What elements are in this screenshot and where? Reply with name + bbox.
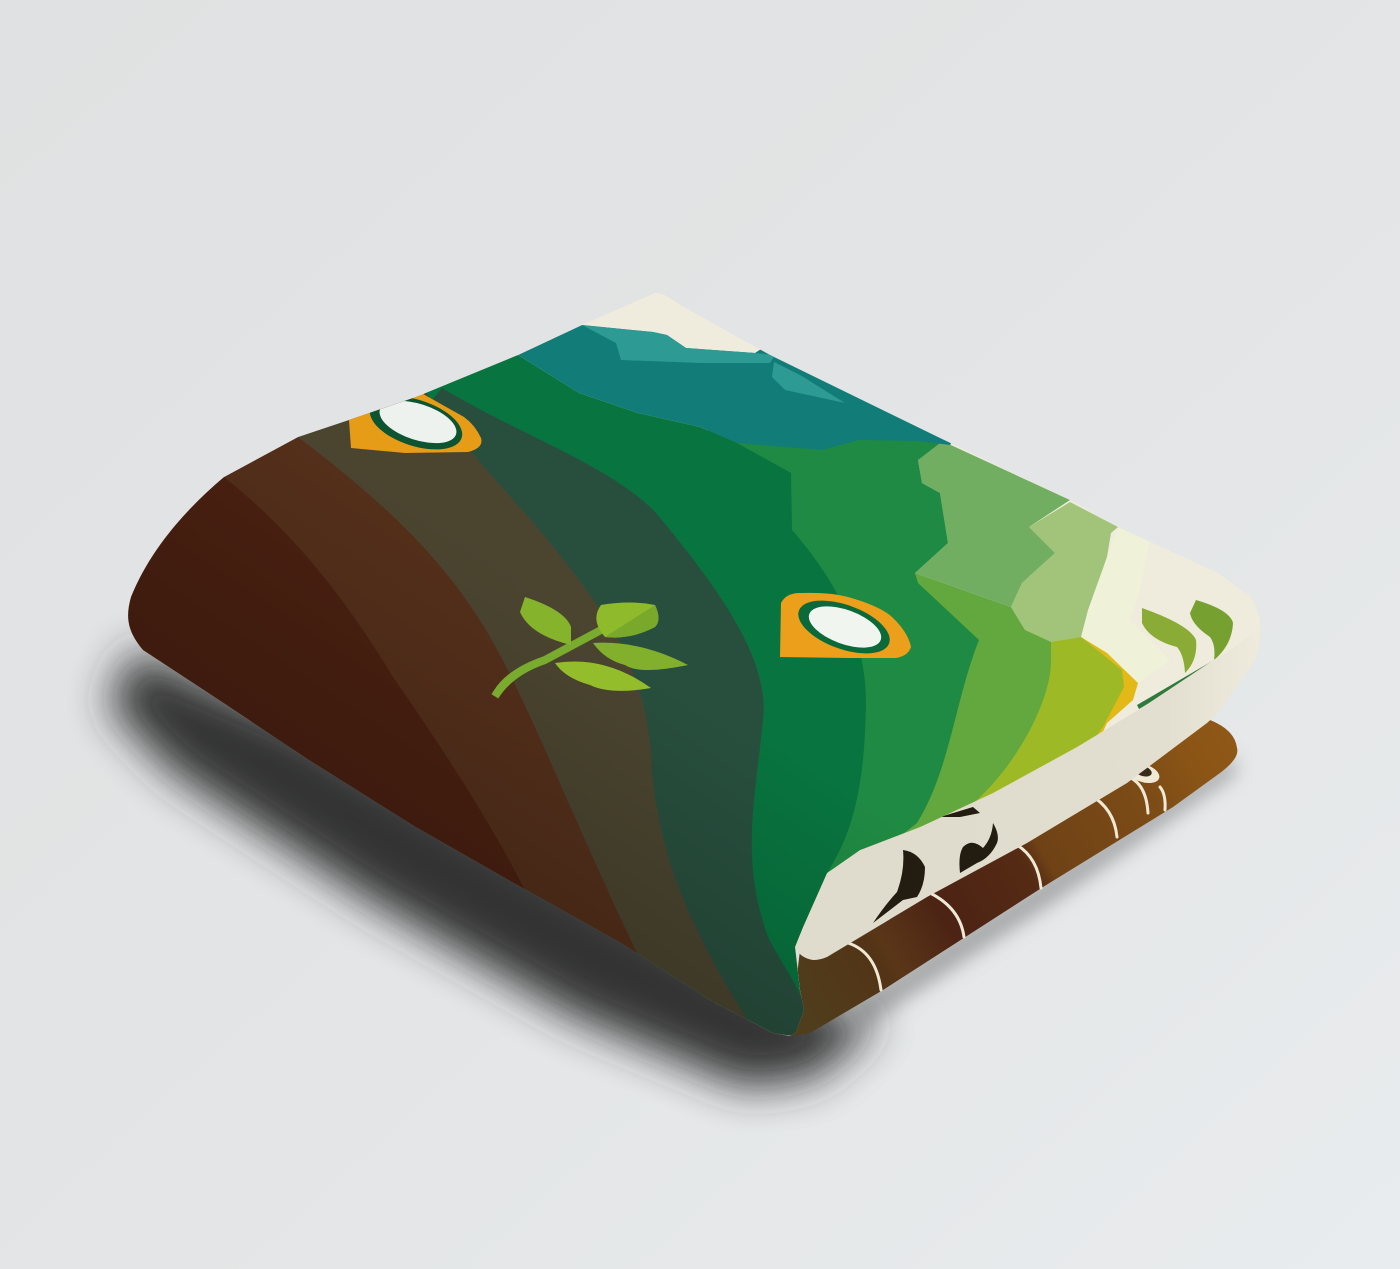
band: yellow [708, 632, 1138, 1010]
blanket top face with landscape bands [128, 293, 1244, 1036]
pin fragment on lower layer [1124, 759, 1162, 787]
band: teal mountains [518, 325, 960, 450]
band: pale green hill [1011, 502, 1118, 642]
black silhouette marks [873, 807, 998, 923]
band: dark brown [128, 477, 524, 889]
illustration: folded landscape blanket [78, 293, 1260, 1119]
lower shading on roll [128, 520, 815, 1036]
cream folded flap [795, 593, 1260, 960]
band: brown [224, 437, 637, 954]
band: deep green [376, 355, 866, 1035]
white seam lines [848, 775, 1165, 990]
band: light teal ridge [582, 325, 775, 363]
band: light teal ridge right [772, 362, 845, 403]
band: soft green hill [915, 440, 1070, 607]
icon: sprout leaves at right [1137, 600, 1233, 709]
drop shadow [108, 650, 1235, 1088]
band: bright green [700, 430, 979, 1040]
band: cream sky [136, 293, 1244, 1036]
band: lime [795, 637, 1124, 968]
band: pale highlight beside hills [1081, 527, 1170, 683]
band: dark grey green [432, 388, 804, 1036]
lower blanket layer [790, 720, 1237, 1036]
band: leaf green [795, 573, 1051, 956]
icon: location pin one [349, 394, 482, 453]
band: olive [298, 393, 747, 1020]
icon: location pin two [780, 592, 911, 658]
icon: leaf sprig [497, 597, 688, 693]
